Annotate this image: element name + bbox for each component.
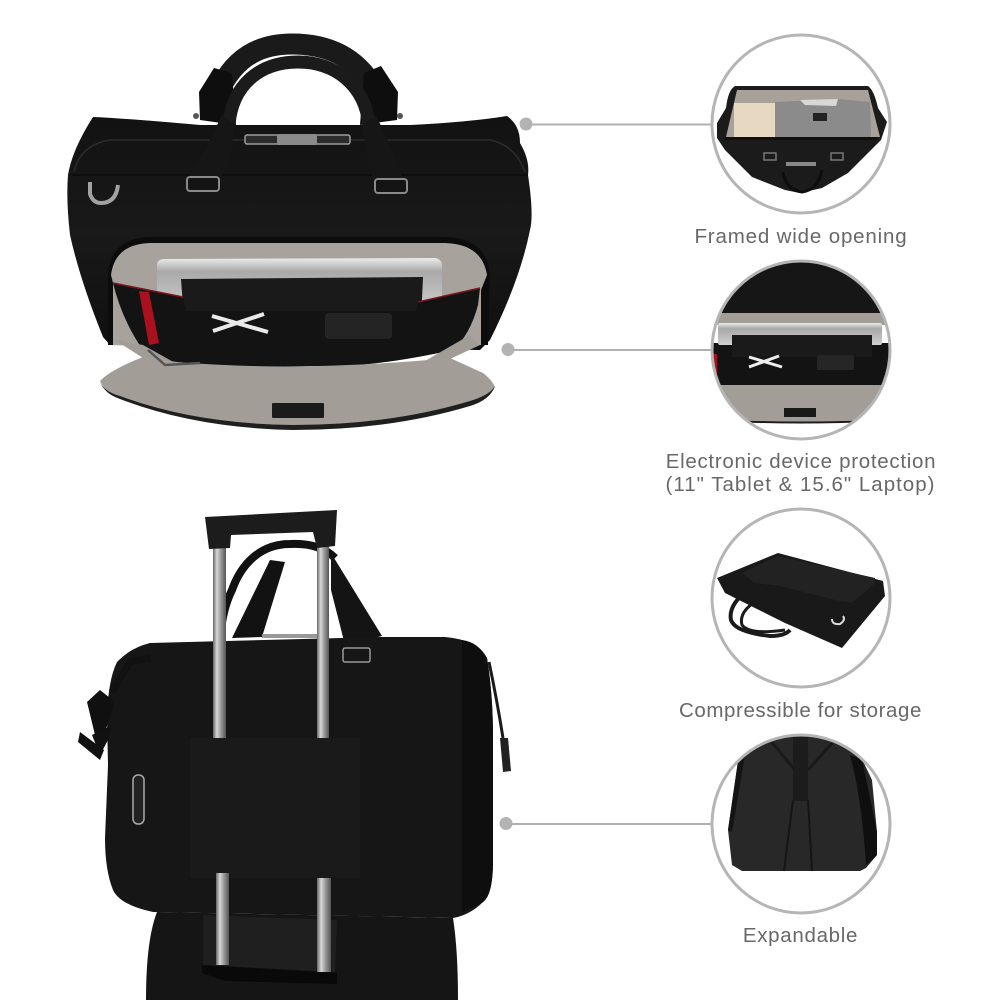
rear handle bbox=[193, 44, 403, 125]
suitcase bbox=[146, 912, 458, 1000]
lower flap bbox=[100, 357, 495, 428]
shoulder strap bbox=[78, 658, 150, 760]
caption: electronic device protection: Electronic device protection bbox=[666, 450, 936, 473]
bag body bbox=[105, 637, 493, 918]
D-ring bbox=[90, 182, 118, 203]
callout line 3 bbox=[500, 817, 712, 830]
rear luggage strap bbox=[190, 738, 360, 878]
cable bow bbox=[212, 314, 268, 332]
trolley frame bbox=[205, 510, 337, 972]
zipper pull bbox=[262, 634, 317, 638]
zipper pull bbox=[148, 350, 200, 365]
organizer pocket bbox=[113, 283, 480, 367]
callout line 1 bbox=[520, 118, 712, 130]
lining bbox=[111, 243, 487, 345]
flap edge bbox=[100, 382, 495, 430]
side gusset bbox=[462, 640, 493, 912]
luggage handle tray bbox=[202, 965, 337, 984]
caption: compressible for storage: Compressible for storage bbox=[679, 699, 922, 722]
callout line 2 bbox=[502, 343, 712, 356]
right zipper tab bbox=[500, 738, 511, 772]
handle buckles bbox=[187, 177, 407, 193]
buckle bbox=[343, 648, 370, 662]
caption: framed wide opening: Framed wide opening bbox=[694, 225, 908, 248]
red trim bbox=[113, 283, 480, 302]
zipper plate bbox=[245, 134, 350, 145]
photo: briefcase on rolling luggage bbox=[78, 510, 511, 1000]
caption: electronic device protection bbox=[666, 450, 936, 496]
right zipper pull bbox=[489, 662, 503, 738]
phone bbox=[325, 313, 392, 339]
top zipper seam bbox=[74, 140, 525, 172]
circle: electronic device protection bbox=[710, 260, 892, 442]
photo: open briefcase, top view bbox=[67, 44, 532, 430]
leather patch bbox=[272, 403, 324, 418]
circle: framed wide opening bbox=[710, 34, 892, 216]
circle: compressible for storage bbox=[710, 508, 892, 690]
caption: electronic device protection: (11" Tablet & 15.6" Laptop) bbox=[666, 473, 935, 496]
caption: expandable: Expandable bbox=[743, 924, 858, 947]
front badge bbox=[133, 775, 144, 824]
lining wedges bbox=[115, 335, 480, 364]
bag body bbox=[67, 116, 532, 350]
front opening bbox=[108, 237, 490, 345]
tablet bbox=[181, 277, 423, 320]
seam line bbox=[72, 174, 528, 176]
bag handles bbox=[220, 544, 382, 645]
laptop bbox=[157, 258, 442, 312]
front handle bbox=[188, 62, 405, 188]
circle: expandable bbox=[710, 734, 892, 914]
red zipper tape bbox=[139, 291, 159, 345]
luggage handle recess bbox=[203, 915, 337, 972]
